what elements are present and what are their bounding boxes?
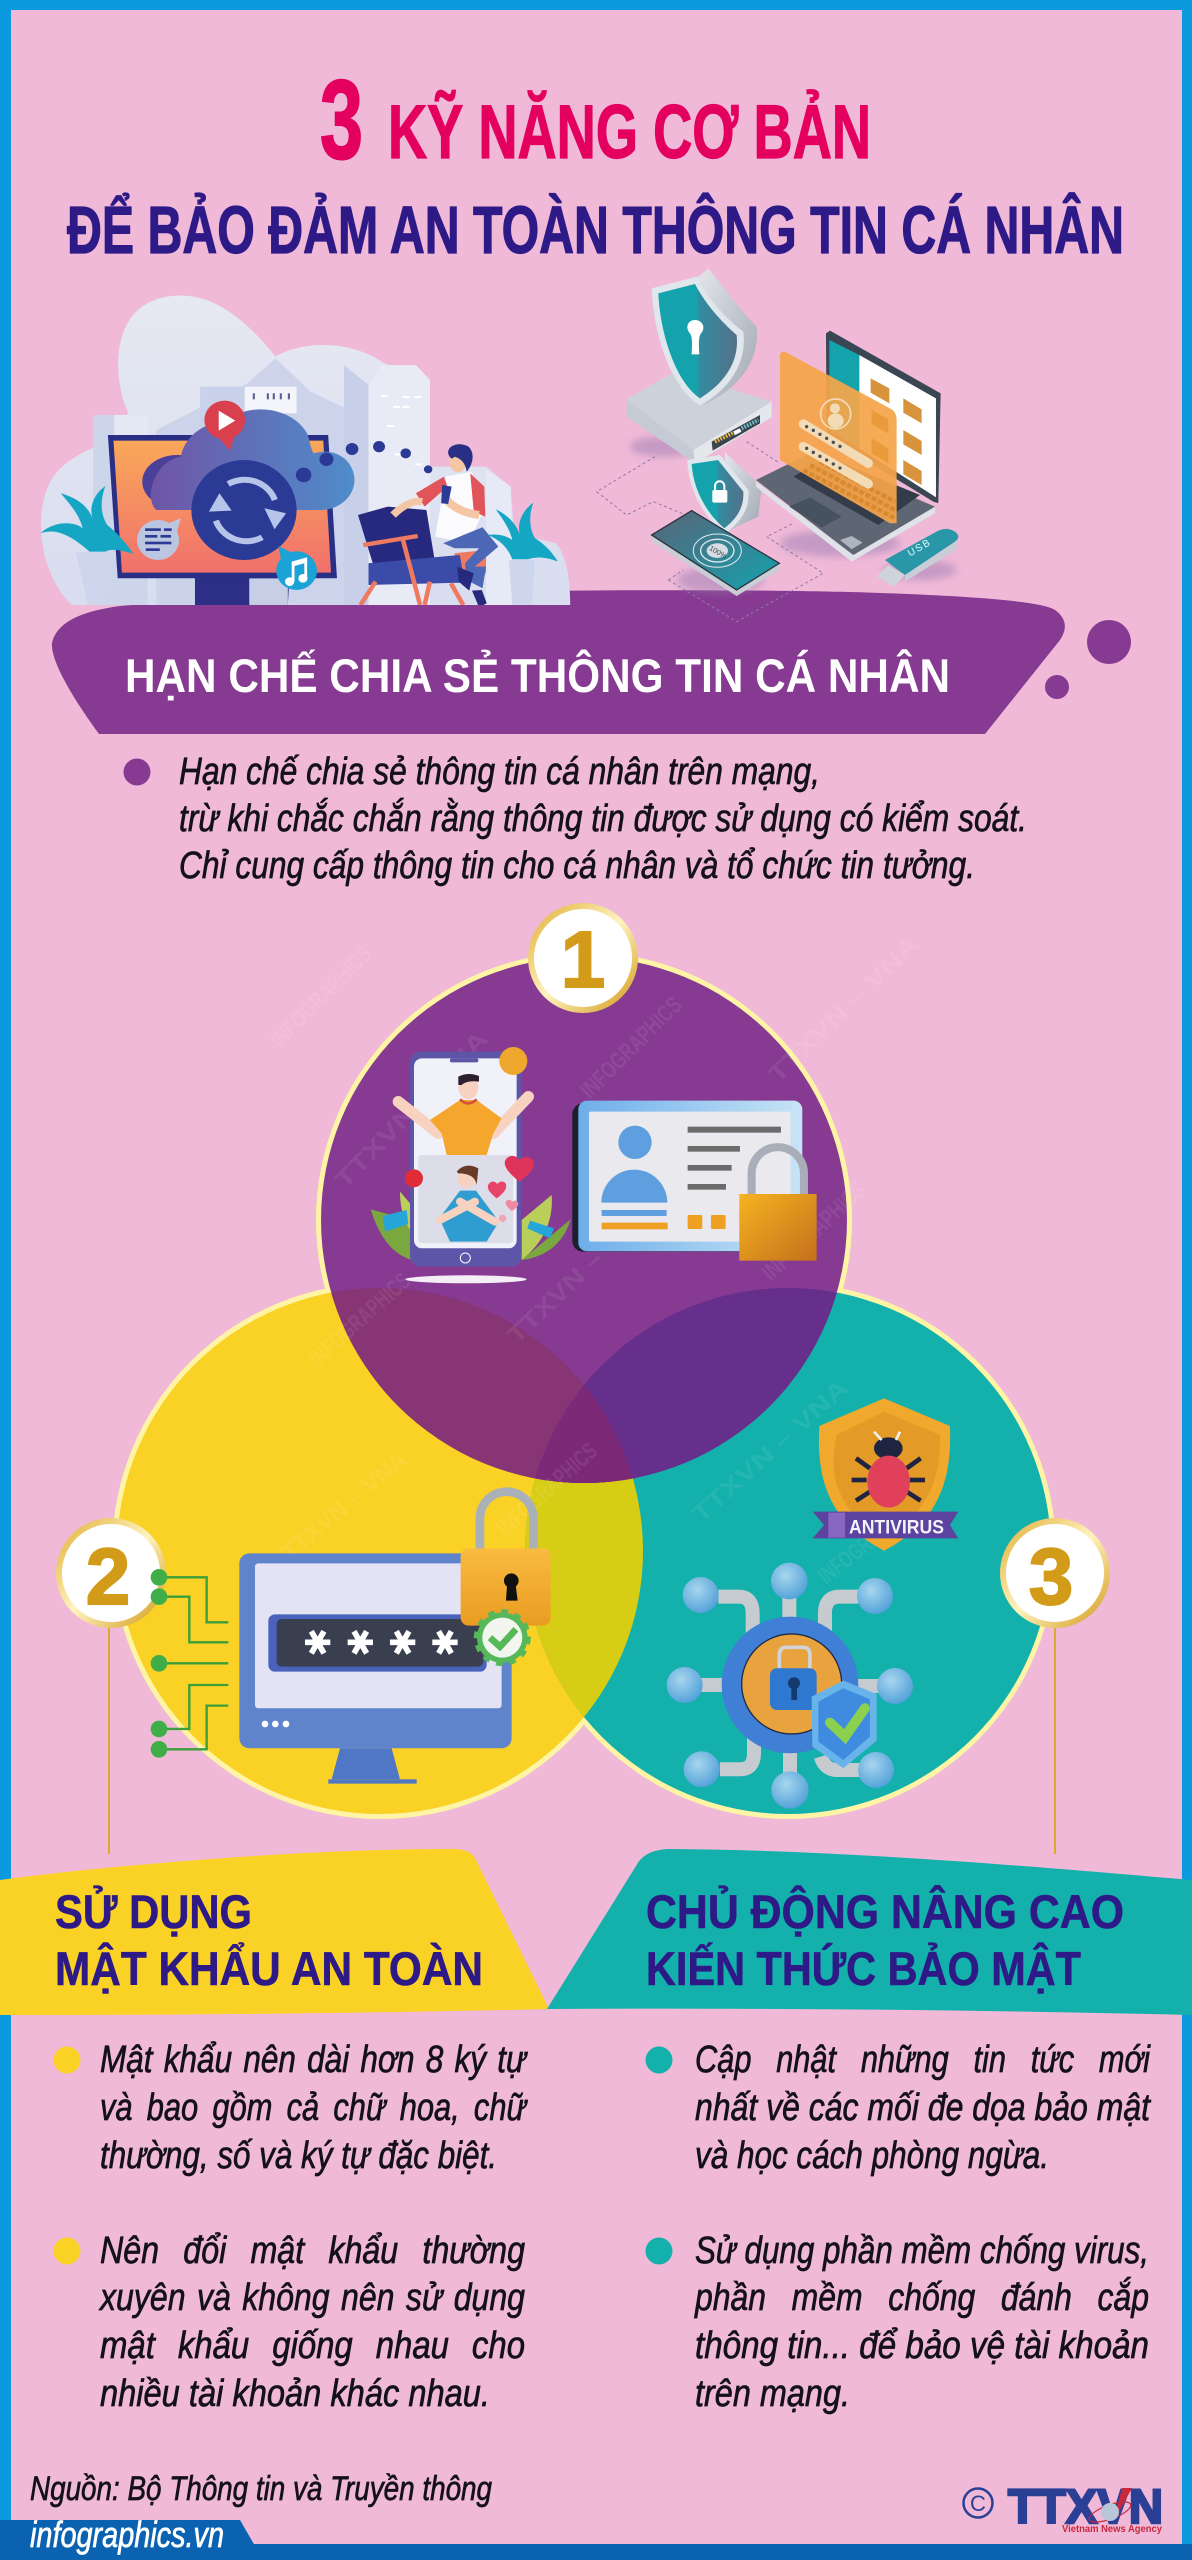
play badge: [405, 1169, 423, 1187]
ladybug: [852, 1432, 925, 1508]
notification badge: [499, 1047, 527, 1075]
panel: security knowledge heading: [547, 1849, 1192, 2015]
plants: [41, 486, 558, 605]
watermarks: INFOGRAPHICS: [304, 1267, 416, 1372]
intro text: Chỉ cung cấp thông tin cho cá nhân và tổ chức tin tưởng.: [179, 845, 975, 887]
TTXVN logo: Vietnam News Agency: [1062, 2524, 1162, 2535]
venn diagram: [112, 952, 1056, 1819]
panel: password heading: [0, 1849, 549, 2015]
chat bubble: [137, 518, 181, 560]
illustration: phone with social media: [371, 1047, 571, 1283]
circle 2 yellow: [117, 1288, 643, 1814]
man: [398, 1074, 528, 1155]
password bullet 2: [54, 2230, 525, 2415]
watermarks: TTXVN – VNA: [502, 1197, 659, 1349]
large shield: [652, 268, 757, 406]
TTXVN logo: TTXVN: [1008, 2481, 1163, 2534]
intro bullet point: [124, 751, 1027, 887]
watermarks: INFOGRAPHICS: [265, 941, 378, 1053]
laptop: [756, 331, 941, 562]
number badge 2: 2: [86, 1532, 130, 1621]
knowledge heading text: CHỦ ĐỘNG NÂNG CAO: [646, 1885, 1124, 1938]
intro text: [179, 751, 1027, 887]
number badge 1: [531, 906, 635, 1010]
illustration: ID card with padlock: [572, 1101, 817, 1261]
illustration: cloud and person: [41, 295, 570, 607]
knowledge bullet 1: [646, 2039, 1151, 2177]
illustration: computer with password: [239, 1492, 551, 1784]
watermarks: TTXVN – VNA: [687, 1375, 854, 1528]
watermarks: INFOGRAPHICS: [757, 1177, 872, 1286]
panel: section 1 banner: [52, 590, 1065, 734]
number badge 2: [59, 1521, 163, 1854]
decorative banner dots: [1045, 620, 1131, 699]
website tab: infographics.vn: [30, 2514, 224, 2555]
usb drive: [877, 529, 958, 587]
person: [393, 444, 498, 607]
number badge 3: 3: [1029, 1532, 1073, 1621]
password field: [268, 1614, 487, 1672]
overlap yellow teal: [525, 1478, 643, 1717]
knowledge bullet 1: và học cách phòng ngừa.: [695, 2135, 1049, 2177]
ribbon: [813, 1512, 958, 1538]
circle 1 purple: [321, 957, 847, 1483]
password bullet 2: Nên đổi mật khẩu thường: [100, 2230, 525, 2272]
ribbon: ANTIVIRUS: [849, 1517, 944, 1538]
overlap centre: [536, 1386, 632, 1483]
monitor: [239, 1553, 512, 1784]
watermarks: TTXVN – VNA: [330, 1026, 494, 1194]
usb drive: USB: [906, 537, 934, 559]
play bubble: [204, 401, 245, 451]
title: [67, 57, 1124, 268]
overlap purple teal: [535, 1288, 837, 1483]
nodes: [667, 1563, 913, 1809]
illustration: antivirus shield: [813, 1398, 958, 1551]
woman: [439, 1165, 499, 1242]
illustration: network lock: [667, 1563, 913, 1809]
watermarks: [265, 931, 925, 1590]
cloud: [142, 409, 354, 510]
pipes: [683, 1580, 895, 1790]
TTXVN logo: C: [970, 2491, 986, 2516]
padlock: [461, 1492, 551, 1626]
knowledge bullet 2: trên mạng.: [695, 2373, 850, 2415]
overlap purple yellow: [331, 1288, 632, 1483]
watermarks: TTXVN – VNA: [277, 1446, 413, 1567]
banner heading: HẠN CHẾ CHIA SẺ THÔNG TIN CÁ NHÂN: [125, 649, 950, 702]
intro text: trừ khi chắc chắn rằng thông tin được sử dụng có kiểm soát.: [179, 797, 1027, 840]
watermarks: TTXVN – VNA: [763, 931, 925, 1088]
phone body: [410, 1052, 522, 1267]
password bullet 1: và bao gồm cả chữ hoa, chữ: [100, 2087, 528, 2129]
watermarks: INFOGRAPHICS: [813, 1495, 924, 1590]
password bullet 2: mật khẩu giống nhau cho: [100, 2325, 525, 2367]
password bullet 2: nhiều tài khoản khác nhau.: [100, 2373, 490, 2415]
password bullet 1: Mật khẩu nên dài hơn 8 ký tự: [100, 2039, 528, 2081]
number badge 1: 1: [561, 915, 605, 1004]
padlock: [739, 1147, 817, 1261]
check shield: [812, 1681, 877, 1768]
password heading text: [55, 1885, 483, 1995]
small shield: [687, 453, 762, 534]
title line 1: 3: [320, 57, 363, 182]
orange glass login panel: [780, 352, 897, 523]
password bullet 1: [54, 2039, 528, 2177]
illustration: security devices: [597, 268, 958, 622]
check badge: [476, 1611, 529, 1664]
server box: [627, 372, 772, 463]
soft shadows: [630, 437, 957, 593]
number badge 3: [1003, 1521, 1107, 1854]
source: Nguồn: Bộ Thông tin và Truyền thông: [30, 2470, 492, 2508]
password bullet 1: thường, số và ký tự đặc biệt.: [100, 2135, 497, 2177]
monitor: [108, 435, 337, 578]
knowledge heading text: KIẾN THỨC BẢO MẬT: [646, 1942, 1081, 1995]
password heading text: MẬT KHẨU AN TOÀN: [55, 1942, 483, 1995]
watermarks: INFOGRAPHICS: [492, 1438, 603, 1541]
data dots: [296, 441, 432, 482]
title line 1: [320, 57, 871, 182]
leaves: [371, 1192, 571, 1260]
dashed connectors: [597, 442, 823, 622]
padlock: [770, 1647, 817, 1710]
password heading text: SỬ DỤNG: [55, 1885, 252, 1938]
circuit lines from badge 2: [151, 1569, 228, 1758]
sync icon: [191, 460, 297, 560]
watermarks: INFOGRAPHICS: [575, 992, 688, 1104]
hearts: [488, 1156, 534, 1222]
title line 1: KỸ NĂNG CƠ BẢN: [388, 90, 871, 175]
knowledge heading text: [646, 1885, 1124, 1995]
password bullet 2: xuyên và không nên sử dụng: [98, 2277, 525, 2319]
social tags: [383, 1210, 554, 1238]
music bubble: [276, 546, 317, 590]
circle 3 teal: [525, 1288, 1051, 1814]
armchair: [358, 507, 486, 605]
phone: 100%: [708, 543, 729, 561]
knowledge bullet 2: [646, 2230, 1149, 2415]
phone: [652, 511, 779, 596]
intro text: Hạn chế chia sẻ thông tin cá nhân trên mạng,: [179, 751, 820, 793]
footer bar: [0, 2544, 1192, 2560]
